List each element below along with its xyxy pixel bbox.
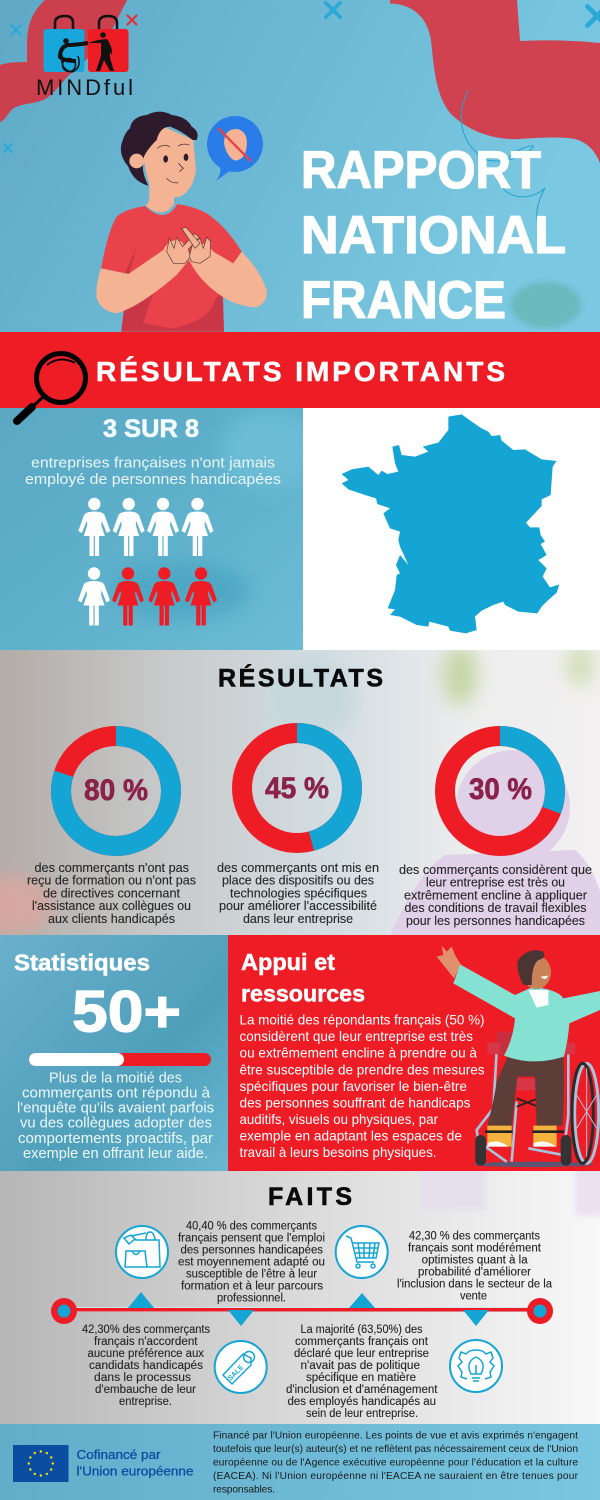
banner: résultats importants: RÉSULTATS IMPORTANTS — [96, 356, 505, 387]
text: disclaimer: toutefois que leur(s) auteur(s) et ne reflètent pas nécessairement ceux de l'Union — [213, 1444, 578, 1455]
panel: résultats — [0, 643, 600, 935]
text: caption 80 %: des commerçants n'ont pas — [34, 860, 189, 875]
text: statistiques body: commerçants ont répondu à — [22, 1086, 211, 1102]
decorative blue squiggle — [461, 90, 545, 233]
text: caption 30 % — [399, 862, 592, 928]
text: caption 45 % — [217, 860, 379, 926]
face — [143, 125, 196, 197]
decorative crosses — [4, 3, 600, 152]
text: fact 63,50 %: sein de leur entreprise. — [306, 1408, 418, 1420]
text: entreprises: entreprises françaises n'ont jamais — [31, 456, 275, 472]
panel: map of France — [303, 408, 600, 650]
text: appui body: exemple en adaptant les espaces de — [240, 1128, 462, 1144]
icon: red padlock — [88, 16, 128, 72]
icon: EU flag — [13, 1445, 68, 1482]
text: caption 80 % — [27, 860, 196, 926]
text: caption 80 %: reçu de formation ou n'ont pas — [27, 872, 196, 888]
heading: résultats: RÉSULTATS — [218, 664, 383, 692]
trousers — [487, 1052, 564, 1127]
text: appui body: auditifs, visuels ou physiques, par — [240, 1111, 438, 1127]
heading: appui et ressources: ressources — [241, 980, 365, 1006]
panel: 3 sur 8 — [0, 408, 320, 650]
text: fact 42,30 % left: dans le processus — [94, 1372, 191, 1384]
text: caption 45 %: technologies spécifiques — [230, 886, 367, 900]
donut chart: 80 %: 80 % — [84, 774, 148, 807]
text: caption 80 %: l'assistance aux collègues ou — [32, 898, 191, 913]
text: fact 63,50 %: commerçants français ont — [295, 1336, 429, 1348]
neck — [146, 180, 174, 213]
donut chart: 30 % — [445, 736, 555, 846]
text: statistiques body — [17, 1070, 214, 1162]
icon: sale tag — [215, 1341, 267, 1393]
text: fact 42,30 % right: probabilité d'améliorer — [418, 1267, 531, 1279]
text: statistiques body: Plus de la moitié des — [49, 1070, 182, 1086]
text: fact 40,40 %: formation et à leur parcours — [181, 1280, 323, 1292]
timeline node left — [51, 1298, 77, 1324]
donut chart: 80 % — [61, 736, 171, 846]
text: fact 63,50 %: spécifique en matière — [306, 1372, 416, 1384]
text: fact 63,50 %: d'inclusion et d'aménagement — [286, 1384, 438, 1396]
icon: sale tag: SALE — [227, 1364, 245, 1382]
hair — [121, 112, 198, 186]
title: NATIONAL — [301, 206, 566, 265]
decorative red blob left — [0, 0, 127, 122]
text: fact 42,30 % left: français n'accordent — [94, 1336, 198, 1348]
wheelchair frame — [477, 1052, 568, 1162]
text: fact 40,40 %: 40,40 % des commerçants — [186, 1220, 317, 1232]
text: disclaimer: Financé par l'Union européenne. Les points de vue et avis exprimés n'engagent — [213, 1431, 578, 1442]
text: fact 42,30 % left: candidats handicapés — [89, 1360, 203, 1372]
big number: 50+: 50+ — [72, 980, 181, 1044]
text: fact 42,30 % right — [397, 1230, 553, 1303]
panel: footer — [0, 1424, 600, 1500]
text: fact 42,30 % left: aucune préférence aux — [88, 1348, 204, 1360]
progress bar — [29, 1053, 211, 1066]
heading: 3 sur 8: 3 SUR 8 — [103, 415, 199, 443]
text: caption 45 %: des commerçants ont mis en — [217, 860, 379, 875]
arrow up 2 — [349, 1293, 375, 1308]
front wheels — [475, 1135, 571, 1166]
text: appui body: spécifiques pour favoriser le bien-être — [240, 1078, 467, 1094]
decorative red blob right — [390, 0, 600, 163]
neck — [528, 990, 548, 1008]
arrow up 1 — [128, 1292, 154, 1308]
timeline — [51, 1292, 553, 1326]
banner: résultats importants — [0, 332, 600, 421]
heading: statistiques: Statistiques — [14, 950, 150, 976]
text: statistiques body: exemple en offrant leur aide. — [23, 1146, 208, 1162]
text: fact 63,50 %: des employés handicapés au — [288, 1396, 436, 1408]
title: RAPPORT — [301, 141, 541, 200]
arrow down 2 — [463, 1310, 489, 1326]
panel: appui et ressources — [228, 935, 600, 1172]
icon: shopping cart — [336, 1226, 388, 1278]
map: France — [342, 414, 559, 633]
text: fact 40,40 %: des personnes handicapées — [180, 1245, 323, 1257]
text: fact 42,30 % right: l'inclusion dans le secteur de la — [397, 1279, 553, 1291]
text: fact 42,30 % left: entreprise. — [119, 1396, 172, 1408]
text: caption 30 %: pour les personnes handicapées — [406, 913, 585, 928]
illustration: person in wheelchair — [437, 946, 600, 1167]
text: disclaimer: (EACEA). Ni l'Union européenne ni l'EACEA ne sauraient en être tenues pour — [213, 1471, 579, 1482]
hands — [167, 227, 211, 263]
text: fact 42,30 % right: 42,30 % des commerçants — [409, 1230, 540, 1242]
timeline node right — [527, 1298, 553, 1324]
icon: magnifying glass — [17, 354, 86, 421]
heading: appui et ressources — [241, 949, 365, 1006]
text: fact 40,40 %: français pensent que l'emploi — [178, 1233, 325, 1245]
pictogram: 8 people — [78, 498, 217, 626]
shoes — [485, 1126, 564, 1147]
text: cofinancé: l'Union européenne — [76, 1464, 194, 1478]
text: statistiques body: l'enquête qu'ils avaient parfois — [17, 1100, 214, 1116]
icon: shopping bags — [116, 1226, 168, 1278]
text: appui body: travail à leurs besoins physiques. — [240, 1144, 436, 1160]
text: caption 30 %: extrêmement encline à appliquer — [404, 888, 588, 902]
donut chart: 45 %: 45 % — [265, 772, 329, 805]
text: caption 80 %: de directives concernant — [43, 886, 180, 900]
donut chart: 30 %: 30 % — [469, 773, 532, 806]
text: cofinancé — [76, 1447, 194, 1478]
text: caption 30 %: des commerçants considèrent que — [399, 862, 592, 877]
text: appui body: considèrent que leur entreprise est très — [240, 1028, 473, 1044]
hand — [437, 946, 461, 978]
text: caption 45 %: dans leur entreprise — [243, 911, 353, 926]
shirt — [101, 204, 242, 332]
text: fact 40,40 %: est moyennement adapté ou — [178, 1256, 325, 1268]
text: fact 42,30 % left — [82, 1324, 210, 1408]
heading: appui et ressources: Appui et — [241, 949, 335, 975]
text: caption 30 %: des conditions de travail flexibles — [404, 900, 587, 915]
text: statistiques body: vu des collègues adopter des — [20, 1116, 212, 1132]
icon: blue padlock — [44, 16, 84, 72]
ground shadow — [473, 1162, 593, 1167]
text: caption 30 %: leur entreprise est très ou — [426, 874, 565, 890]
wheelchair rear wheel — [572, 1063, 599, 1163]
head — [522, 956, 551, 989]
hoodie — [453, 964, 600, 1061]
text: caption 45 %: place des dispositifs ou des — [222, 872, 374, 888]
text: appui body: La moitié des répondants français (50 %) — [240, 1012, 484, 1028]
logo: MINDful — [36, 16, 133, 100]
text: fact 42,30 % left: d'embauche de leur — [95, 1384, 196, 1396]
text: appui body: ou extrêmement encline à prendre ou à — [240, 1044, 477, 1060]
text: entreprises — [25, 456, 281, 488]
text: disclaimer — [213, 1431, 579, 1496]
panel: header — [0, 0, 600, 332]
text: fact 42,30 % right: vente — [460, 1291, 487, 1303]
text: fact 42,30 % right: français sont modérément — [408, 1242, 542, 1254]
text: fact 40,40 %: susceptible de l'être à leur — [186, 1268, 317, 1280]
text: fact 63,50 %: déclaré que leur entreprise — [294, 1348, 429, 1360]
title — [301, 141, 566, 330]
illustration: person signing — [96, 112, 267, 332]
text: entreprises: employé de personnes handicapées — [25, 472, 281, 488]
panel: faits — [0, 1160, 600, 1424]
text: fact 42,30 % right: optimistes quant à la — [422, 1255, 528, 1267]
ear — [129, 154, 144, 168]
seat and armrests — [487, 1032, 575, 1090]
icon: wheelchair user — [60, 38, 88, 72]
arrow down 1 — [228, 1310, 254, 1326]
text: caption 80 %: aux clients handicapés — [48, 911, 175, 926]
text: cofinancé: Cofinancé par — [76, 1447, 161, 1462]
text: statistiques body: comportements proactifs, par — [18, 1131, 213, 1147]
text: disclaimer: européenne ou de l'Agence exécutive européenne pour l'éducation et la culture — [213, 1458, 578, 1469]
text: appui body — [240, 1012, 484, 1160]
text: fact 63,50 %: n'avait pas de politique — [300, 1360, 420, 1372]
title: FRANCE — [301, 271, 506, 330]
text: appui body: être susceptible de prendre des mesures — [240, 1062, 484, 1078]
heading: faits: FAITS — [268, 1183, 352, 1211]
icon: deaf speech bubble — [207, 116, 263, 182]
text: fact 40,40 %: professionnel. — [217, 1292, 286, 1304]
donut chart: 45 % — [242, 733, 352, 843]
arms — [96, 240, 192, 313]
icon: light bulb gear — [450, 1340, 502, 1392]
text: fact 63,50 % — [286, 1324, 438, 1420]
icon: standing person — [88, 32, 114, 71]
logo text: MINDful — [36, 75, 133, 100]
text: appui body: des personnes souffrant de handicaps — [240, 1094, 470, 1110]
text: fact 40,40 % — [178, 1220, 325, 1304]
eyes — [163, 154, 188, 163]
text: fact 42,30 % left: 42,30% des commerçants — [82, 1324, 210, 1336]
text: disclaimer: responsables. — [213, 1485, 275, 1496]
panel: statistiques — [0, 935, 228, 1172]
text: fact 63,50 %: La majorité (63,50%) des — [300, 1324, 423, 1336]
text: caption 45 %: pour améliorer l'accessibilité — [219, 898, 377, 913]
